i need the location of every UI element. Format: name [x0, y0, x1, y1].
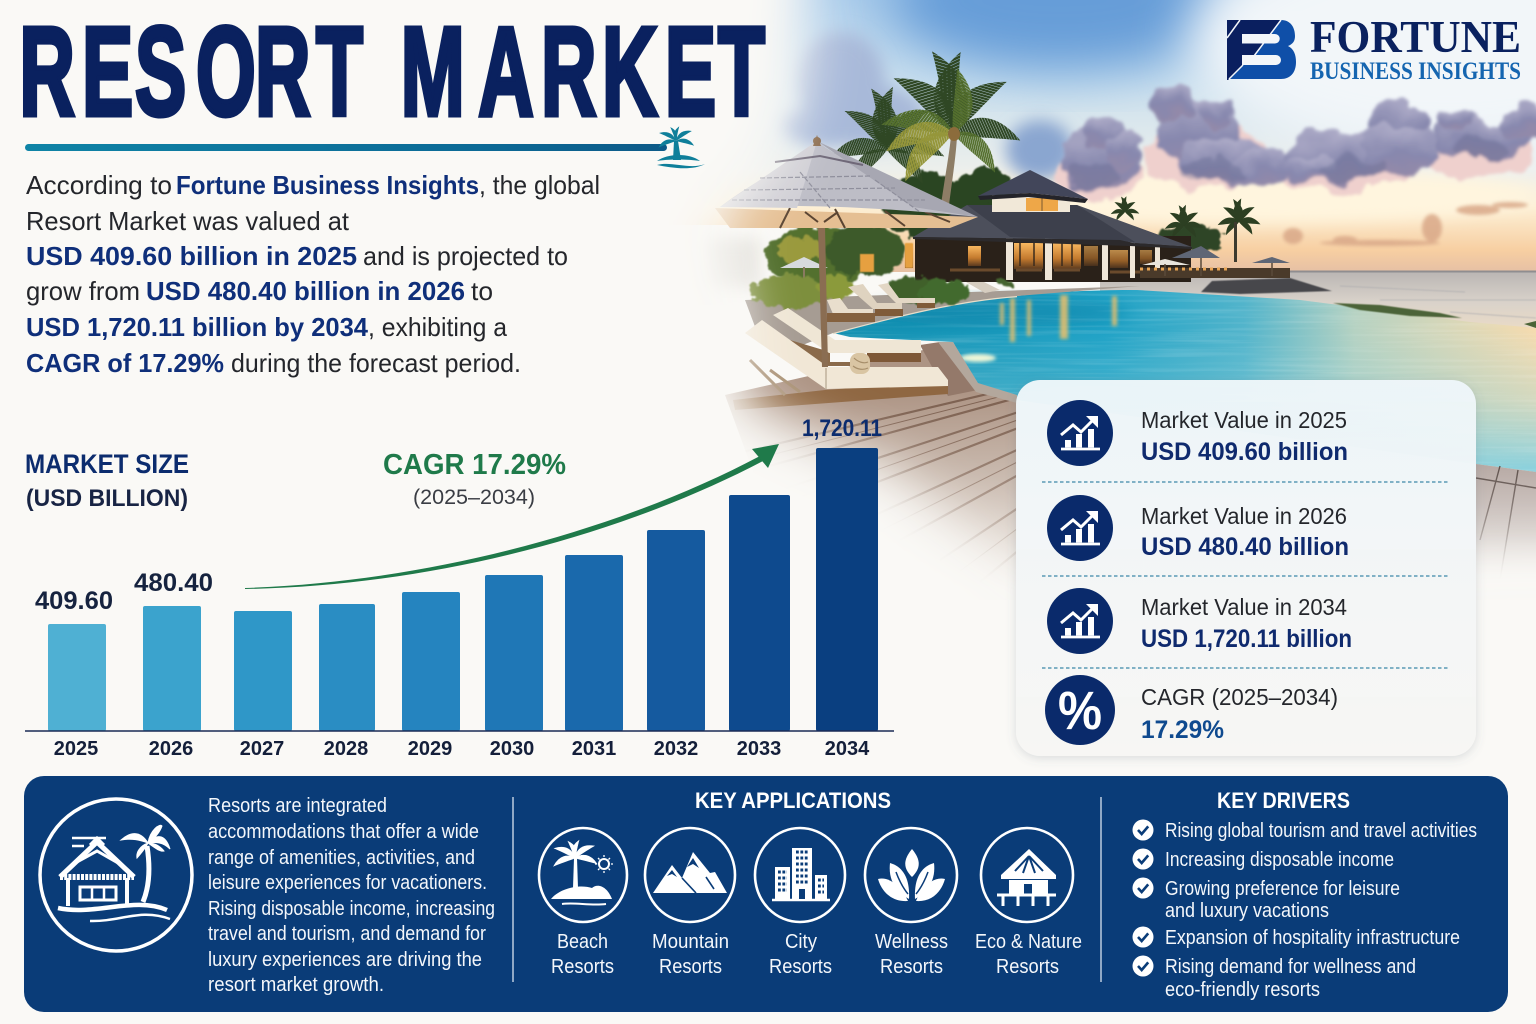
application: wellness resorts: Wellness	[875, 931, 948, 953]
market value 2034: Market Value in 2034	[1141, 594, 1347, 620]
bar chart: 2033	[737, 738, 781, 760]
sea	[1100, 271, 1536, 333]
application: mountain resorts: Resorts	[659, 956, 722, 978]
icon: palm island	[657, 125, 705, 168]
intro paragraph: USD 1,720.11 billion by 2034	[26, 312, 369, 342]
intro paragraph: Resort Market was valued at	[26, 206, 350, 236]
market value 2026: Market Value in 2026	[1141, 503, 1347, 529]
stone terrace	[745, 286, 1140, 350]
definition text: accommodations that offer a wide	[208, 821, 479, 843]
key drivers list	[1132, 820, 1477, 1001]
logo: Fortune Business Insights: FORTUNE	[1310, 11, 1521, 62]
panel: market values	[1016, 380, 1476, 756]
definition text: resort market growth.	[208, 974, 384, 996]
bar chart: 1,720.11	[802, 415, 882, 442]
bar chart: 2026	[149, 738, 193, 760]
key drivers list: Rising demand for wellness and	[1165, 956, 1416, 978]
CAGR label	[383, 449, 566, 509]
CAGR value: CAGR (2025–2034)	[1141, 684, 1338, 710]
market value 2034: USD 1,720.11 billion	[1141, 625, 1352, 653]
bar chart: 2030	[490, 738, 534, 760]
application: wellness resorts	[865, 828, 957, 978]
shoreline rocks and plants	[1201, 278, 1536, 328]
bar chart: 2027	[240, 738, 284, 760]
panel: bottom summary	[24, 776, 1508, 1012]
trees behind resort	[883, 168, 1261, 262]
intro paragraph: , the global	[479, 170, 600, 200]
bar chart: 480.40	[134, 569, 213, 597]
title: RESORT MARKET	[19, 3, 765, 143]
application: beach resorts	[539, 828, 627, 978]
market value 2026: USD 480.40 billion	[1141, 533, 1349, 561]
definition text: leisure experiences for vacationers.	[208, 872, 487, 894]
intro paragraph: According to	[26, 170, 172, 200]
infinity pool	[833, 290, 1536, 472]
intro paragraph: during the forecast period.	[231, 348, 521, 378]
resort building	[905, 170, 1290, 282]
application: eco and nature resorts: Eco & Nature	[975, 931, 1082, 953]
CAGR value	[1045, 675, 1338, 745]
heading: key applications: KEY APPLICATIONS	[695, 788, 891, 813]
CAGR value: 17.29%	[1141, 716, 1224, 744]
bar chart	[25, 415, 894, 760]
CAGR label: CAGR 17.29%	[383, 449, 566, 481]
intro paragraph: CAGR of 17.29%	[26, 348, 224, 378]
arrow: CAGR growth curve	[245, 444, 779, 589]
application: city resorts: Resorts	[769, 956, 832, 978]
chart heading: market size	[25, 449, 189, 512]
application: eco and nature resorts	[975, 828, 1082, 978]
market value 2025: Market Value in 2025	[1141, 407, 1347, 433]
bar chart: 2029	[408, 738, 452, 760]
definition text: travel and tourism, and demand for	[208, 923, 486, 945]
application: eco and nature resorts: Resorts	[996, 956, 1059, 978]
definition text: luxury experiences are driving the	[208, 949, 482, 971]
title rule	[25, 144, 667, 151]
bar chart: 2025	[54, 738, 98, 760]
CAGR value: %	[1058, 681, 1102, 741]
large sun loungers	[733, 308, 948, 410]
application: city resorts: City	[785, 931, 817, 953]
key drivers list: and luxury vacations	[1165, 900, 1329, 922]
bar chart: 2032	[654, 738, 698, 760]
logo: Fortune Business Insights	[1227, 11, 1521, 85]
chart heading: market size: (USD BILLION)	[26, 485, 188, 512]
bar chart: 2034	[825, 738, 870, 760]
market value 2026	[1047, 495, 1349, 561]
wooden deck	[725, 342, 1536, 574]
gazebos and parasols	[1142, 246, 1290, 276]
application: mountain resorts	[645, 828, 735, 978]
garden shrubs	[750, 275, 1015, 309]
key drivers list: Expansion of hospitality infrastructure	[1165, 927, 1460, 949]
intro paragraph	[26, 170, 600, 378]
bar chart: 2028	[324, 738, 368, 760]
market value 2025	[1047, 400, 1348, 466]
definition text: Rising disposable income, increasing	[208, 898, 495, 920]
bar chart: 409.60	[35, 587, 113, 615]
chart heading: market size: MARKET SIZE	[25, 449, 189, 479]
faded side building and garden	[718, 228, 914, 288]
bar chart: 2031	[572, 738, 616, 760]
key drivers list: Growing preference for leisure	[1165, 878, 1400, 900]
key drivers list: eco-friendly resorts	[1165, 979, 1320, 1001]
definition text	[208, 795, 495, 996]
intro paragraph: USD 409.60 billion in 2025	[26, 241, 357, 271]
intro paragraph: Fortune Business Insights	[176, 170, 479, 200]
heading: key drivers: KEY DRIVERS	[1217, 788, 1350, 813]
application: beach resorts: Resorts	[551, 956, 614, 978]
definition text: Resorts are integrated	[208, 795, 387, 817]
intro paragraph: USD 480.40 billion in 2026	[146, 276, 465, 306]
palm trees	[827, 45, 1023, 205]
intro paragraph: and is projected to	[363, 241, 568, 271]
application: beach resorts: Beach	[557, 931, 608, 953]
key drivers list: Increasing disposable income	[1165, 849, 1394, 871]
intro paragraph: grow from	[26, 276, 140, 306]
application: mountain resorts: Mountain	[652, 931, 729, 953]
CAGR label: (2025–2034)	[413, 486, 535, 509]
small loungers	[827, 282, 1000, 322]
sky	[700, 0, 1536, 272]
clouds	[780, 32, 1536, 246]
application: city resorts	[755, 828, 845, 978]
resort photo scene	[700, 0, 1536, 574]
market value 2025: USD 409.60 billion	[1141, 438, 1348, 466]
intro paragraph: to	[471, 276, 493, 306]
market value 2034	[1047, 588, 1352, 654]
key drivers list: Rising global tourism and travel activities	[1165, 820, 1477, 842]
icon: beach house	[40, 799, 192, 951]
application: wellness resorts: Resorts	[880, 956, 943, 978]
parasol	[715, 135, 978, 367]
definition text: range of amenities, activities, and	[208, 847, 475, 869]
intro paragraph: , exhibiting a	[368, 312, 508, 342]
